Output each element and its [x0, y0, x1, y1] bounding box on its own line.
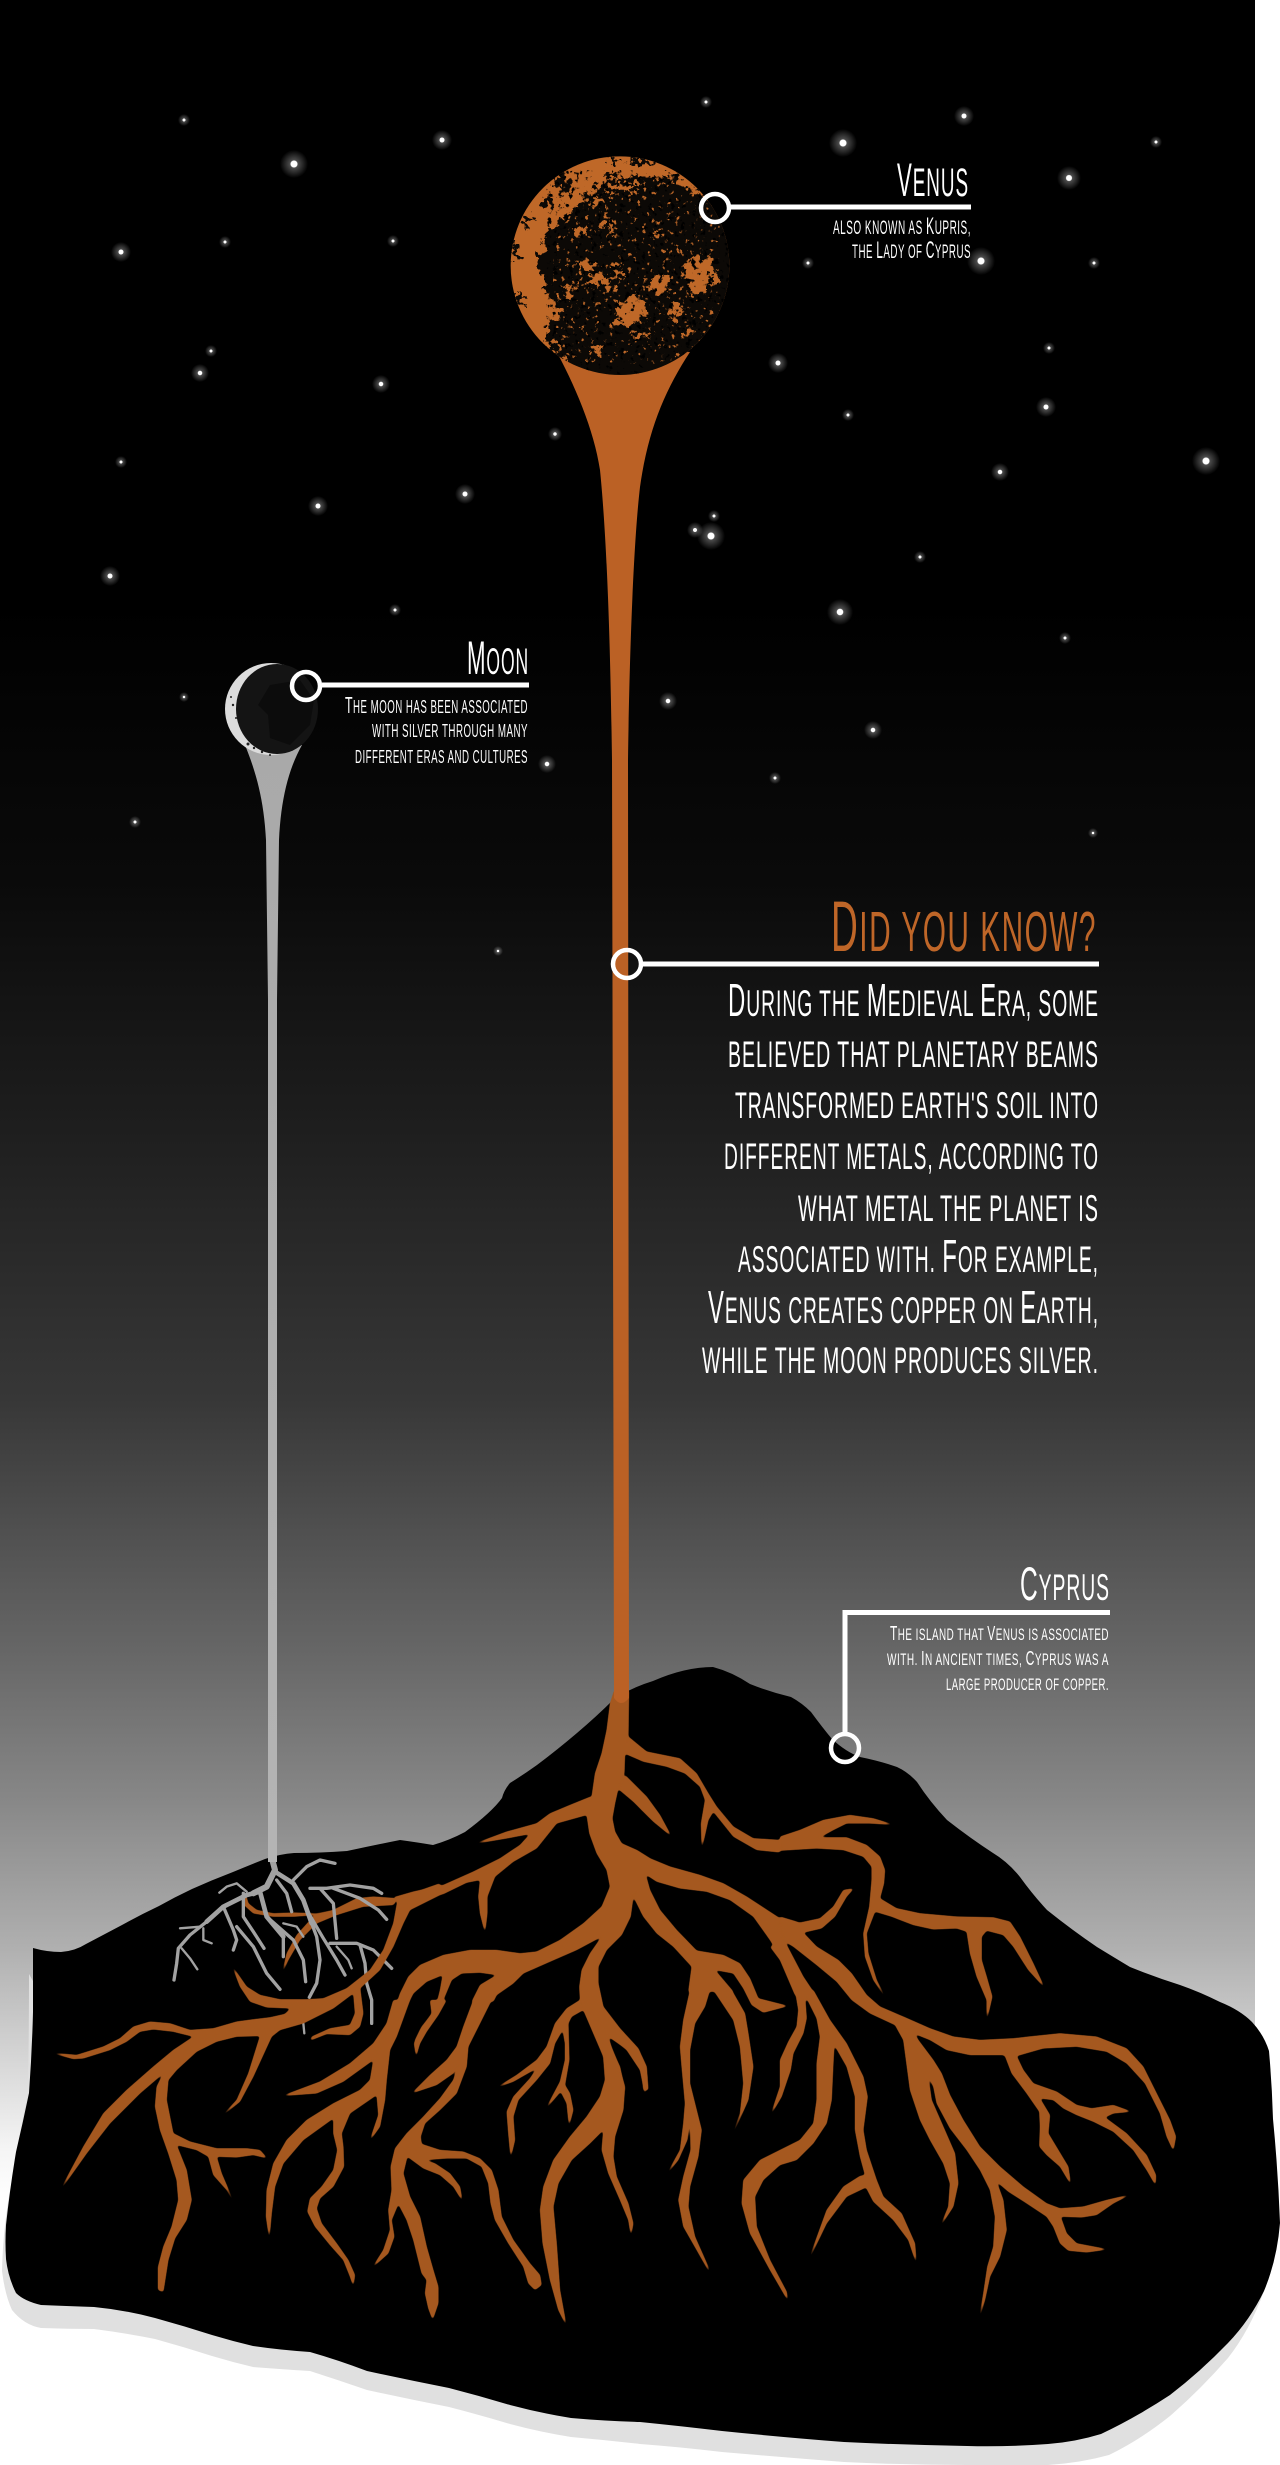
moon	[225, 663, 318, 756]
venus copper beam	[553, 345, 690, 1703]
moon leader line	[322, 682, 529, 688]
lower right-central roots	[666, 1990, 917, 2302]
cyprus leader line	[845, 1612, 1110, 1734]
cyprus text line 1: THE ISLAND THAT VENUS IS ASSOCIATED	[890, 1623, 1109, 1645]
moon crescent	[225, 663, 317, 755]
callout: venus	[701, 153, 971, 264]
lower central roots	[266, 2000, 647, 2327]
did you know leader ring	[613, 950, 641, 978]
venus leader ring	[701, 194, 729, 222]
callout: cyprus	[831, 1557, 1110, 1762]
Cyprus island silhouette	[6, 1667, 1280, 2446]
moon text line 1: THE MOON HAS BEEN ASSOCIATED	[345, 692, 528, 718]
upper right roots	[770, 1815, 1176, 2151]
did you know line 6: ASSOCIATED WITH. FOR EXAMPLE,	[738, 1230, 1099, 1282]
venus text line 1: ALSO KNOWN AS KUPRIS,	[833, 213, 971, 240]
moon crescent specks	[230, 696, 271, 756]
venus heading: VENUS	[897, 153, 969, 206]
moon dark maria	[258, 680, 314, 745]
venus leader line	[730, 204, 971, 210]
trunk and main branches	[387, 1690, 788, 2090]
silver roots	[174, 1860, 392, 2033]
cyprus text line 3: LARGE PRODUCER OF COPPER.	[946, 1676, 1109, 1694]
venus planet	[510, 156, 730, 375]
cyprus text line 2: WITH. IN ANCIENT TIMES, CYPRUS WAS A	[887, 1648, 1109, 1670]
stars	[100, 96, 1220, 956]
moon heading: MOON	[467, 631, 529, 684]
moon text line 2: WITH SILVER THROUGH MANY	[372, 721, 528, 741]
callout: moon	[292, 631, 529, 767]
moon silver beam	[245, 745, 302, 1862]
moon dark disc	[236, 664, 318, 754]
planet surface texture	[510, 156, 730, 375]
planet copper base	[511, 156, 729, 375]
did you know line 1: DURING THE MEDIEVAL ERA, SOME	[728, 974, 1099, 1026]
moon text line 3: DIFFERENT ERAS AND CULTURES	[355, 747, 528, 767]
thin copper roots under the silver roots	[242, 1895, 398, 1975]
cyprus heading: CYPRUS	[1020, 1557, 1110, 1610]
copper roots	[50, 1690, 1176, 2327]
cyprus leader ring	[831, 1734, 859, 1762]
moon leader ring	[292, 672, 320, 700]
callout: did you know	[613, 888, 1099, 1381]
did you know leader line	[642, 962, 1099, 966]
did you know line 7: VENUS CREATES COPPER ON EARTH,	[708, 1281, 1099, 1333]
venus text line 2: THE LADY OF CYPRUS	[852, 237, 971, 264]
land shadow	[2, 1974, 1264, 2465]
left roots	[50, 1883, 440, 2292]
far right roots	[895, 2025, 1156, 2323]
